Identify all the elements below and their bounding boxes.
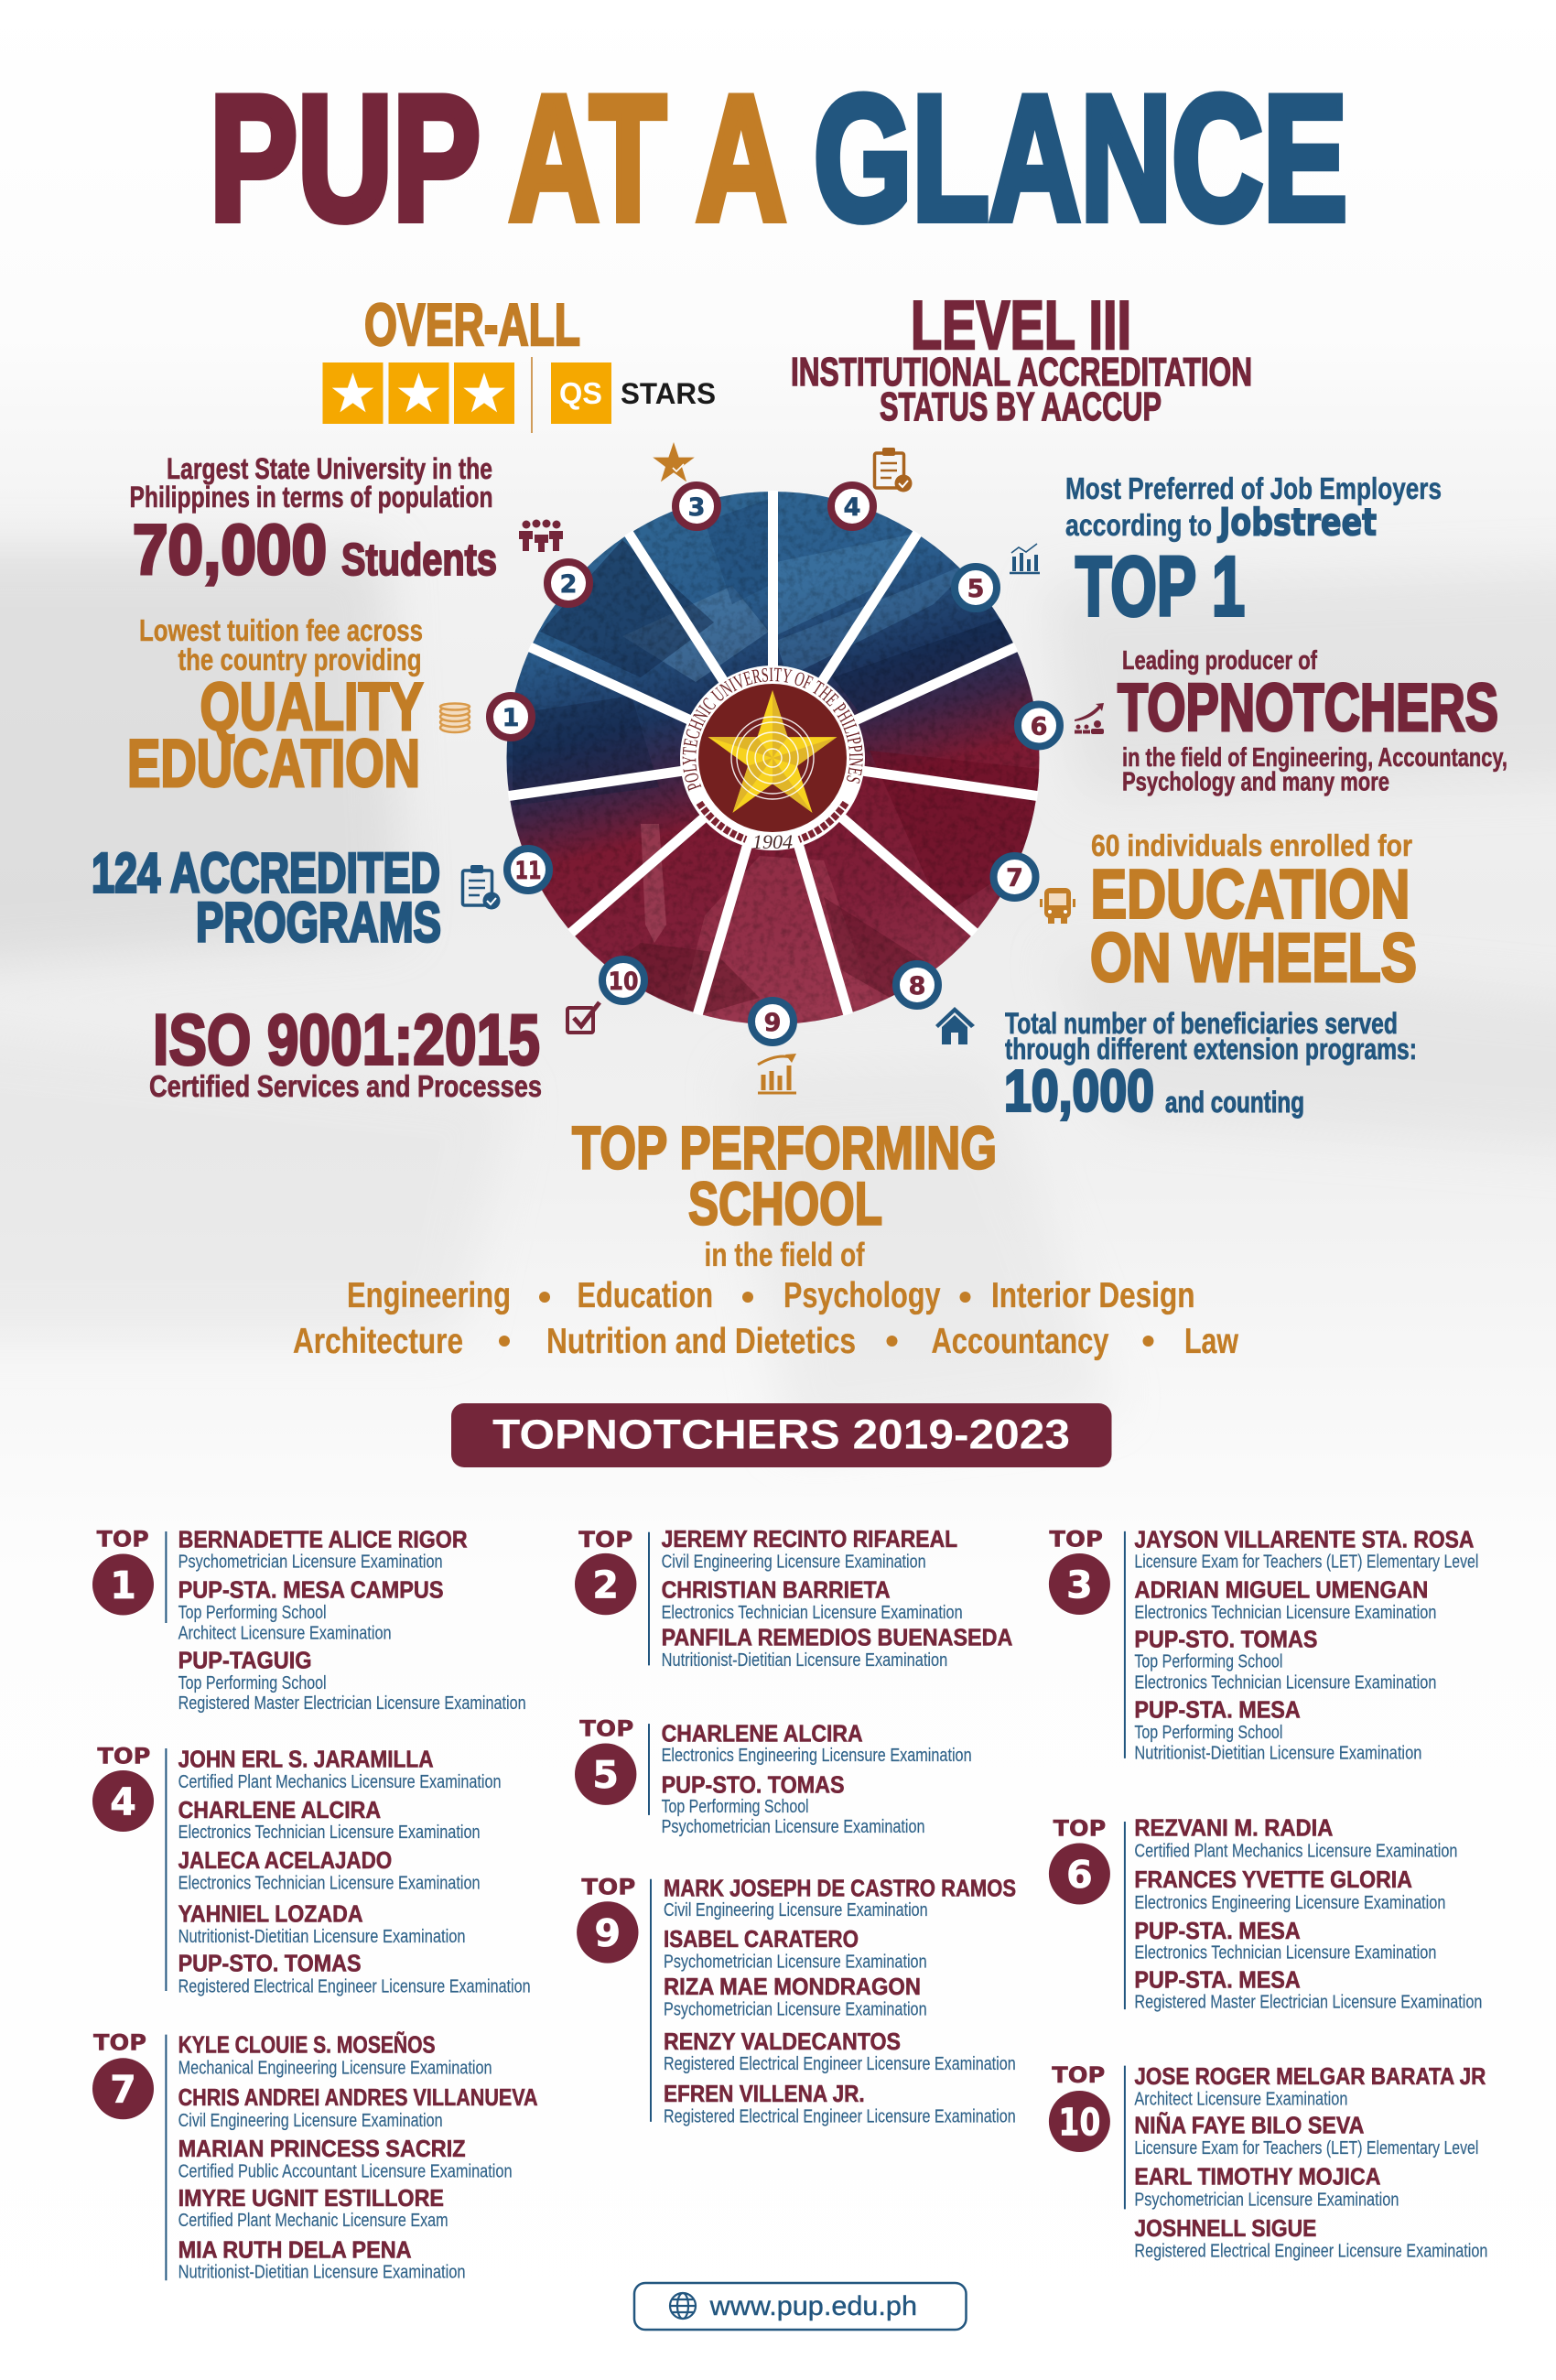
top 2 badge bbox=[575, 1527, 636, 1615]
top 3 badge bbox=[1049, 1526, 1110, 1615]
top 2 block: JEREMY RECINTO RIFAREAL bbox=[662, 1525, 957, 1552]
top 7 block: Nutritionist-Dietitian Licensure Examination bbox=[178, 2263, 466, 2283]
top 5 block: Top Performing School bbox=[662, 1797, 809, 1817]
stat: accredited programs: PROGRAMS bbox=[196, 892, 441, 954]
top 4 block: Electronics Technician Licensure Examination bbox=[178, 1873, 481, 1893]
top 4 block: YAHNIEL LOZADA bbox=[178, 1900, 363, 1928]
stat: education on wheels: ON WHEELS bbox=[1090, 919, 1417, 996]
top 10 block: Architect Licensure Examination bbox=[1134, 2089, 1347, 2109]
top 6 block: Electronics Technician Licensure Examination bbox=[1134, 1943, 1436, 1964]
fields list: Accountancy bbox=[932, 1322, 1109, 1361]
three star boxes bbox=[322, 362, 514, 424]
icon: star with check bbox=[653, 442, 695, 481]
icon: rising people bbox=[1075, 703, 1104, 734]
top 7 badge: TOP bbox=[93, 2030, 146, 2056]
stat: topnotchers: Psychology and many more bbox=[1122, 767, 1389, 796]
top 4 block: JOHN ERL S. JARAMILLA bbox=[178, 1746, 434, 1773]
stat: largest state university: 70,000 bbox=[133, 511, 327, 590]
top 3 block: PUP-STO. TOMAS bbox=[1134, 1626, 1317, 1653]
top 10 block bbox=[1049, 2062, 1487, 2262]
top 9 block: EFREN VILLENA JR. bbox=[664, 2080, 865, 2107]
number badges: 3 bbox=[688, 493, 705, 522]
top 5 badge: TOP bbox=[579, 1716, 633, 1742]
icon: clipboard blue bbox=[463, 865, 500, 910]
top 6 block: Certified Plant Mechanics Licensure Examination bbox=[1134, 1841, 1457, 1861]
top 7 badge bbox=[92, 2030, 154, 2119]
top 7 badge: 7 bbox=[110, 2068, 136, 2112]
top 7 block: Civil Engineering Licensure Examination bbox=[178, 2111, 443, 2131]
website link pill: www.pup.edu.ph bbox=[709, 2291, 917, 2321]
level III accreditation: LEVEL III bbox=[911, 287, 1131, 363]
top 4 block: Certified Plant Mechanics Licensure Examination bbox=[178, 1772, 502, 1792]
top 4 block: JALECA ACELAJADO bbox=[178, 1846, 392, 1874]
top 2 block: Nutritionist-Dietitian Licensure Examination bbox=[662, 1650, 947, 1671]
stat: beneficiaries: and counting bbox=[1165, 1086, 1304, 1119]
top 9 block: RENZY VALDECANTOS bbox=[664, 2028, 901, 2055]
stat: education on wheels: EDUCATION bbox=[1091, 855, 1410, 932]
top 6 badge: 6 bbox=[1066, 1853, 1093, 1897]
fields list: Law bbox=[1184, 1322, 1239, 1361]
top 3 block: Electronics Technician Licensure Examination bbox=[1134, 1673, 1436, 1693]
top 5 badge bbox=[575, 1716, 636, 1805]
number badges: 7 bbox=[1006, 864, 1023, 892]
top 4 block: CHARLENE ALCIRA bbox=[178, 1796, 381, 1823]
number badges bbox=[490, 485, 1060, 1043]
stat: largest state university bbox=[130, 452, 497, 590]
stat: jobstreet top 1: Jobstreet bbox=[1217, 500, 1377, 544]
top 7 block bbox=[92, 2030, 538, 2283]
top 5 block: Electronics Engineering Licensure Examination bbox=[662, 1746, 972, 1766]
icon: growth chart bbox=[758, 1054, 796, 1093]
top 10 badge: 10 bbox=[1058, 2100, 1100, 2144]
top 6 block: PUP-STA. MESA bbox=[1134, 1966, 1301, 1994]
top 7 block: MIA RUTH DELA PENA bbox=[178, 2236, 412, 2264]
top 9 block: Psychometrician Licensure Examination bbox=[664, 1999, 927, 2019]
stat: beneficiaries bbox=[1004, 1007, 1417, 1124]
top 6 block: REZVANI M. RADIA bbox=[1134, 1813, 1334, 1841]
top 10 block: Licensure Exam for Teachers (LET) Elementary Level bbox=[1134, 2138, 1478, 2158]
stat: ISO certification: ISO 9001:2015 bbox=[153, 1000, 540, 1080]
number badges: 1 bbox=[502, 704, 519, 732]
top 9 block: ISABEL CARATERO bbox=[664, 1925, 859, 1953]
number badges: 8 bbox=[909, 972, 925, 1001]
top 6 block: Registered Master Electrician Licensure Examination bbox=[1134, 1992, 1482, 2012]
top 1 block: PUP-STA. MESA CAMPUS bbox=[178, 1575, 444, 1603]
top 10 block: NIÑA FAYE BILO SEVA bbox=[1134, 2112, 1365, 2139]
top 5 badge: 5 bbox=[592, 1753, 619, 1797]
top 10 badge bbox=[1049, 2062, 1110, 2152]
fields list: Architecture bbox=[293, 1322, 463, 1361]
stat: topnotchers: Leading producer of bbox=[1122, 646, 1317, 676]
number badges: 5 bbox=[967, 575, 984, 603]
top 4 block: Nutritionist-Dietitian Licensure Examination bbox=[178, 1927, 466, 1947]
top 9 block: Civil Engineering Licensure Examination bbox=[664, 1900, 928, 1920]
top 7 block: Certified Public Accountant Licensure Examination bbox=[178, 2161, 513, 2181]
stat: beneficiaries: through different extension programs: bbox=[1005, 1033, 1417, 1066]
top 1 block bbox=[92, 1525, 526, 1714]
top 9 block bbox=[577, 1874, 1016, 2127]
top 9 block: Registered Electrical Engineer Licensure Examination bbox=[664, 2107, 1016, 2127]
stat: largest state university: Students bbox=[341, 536, 497, 585]
fields list: Psychology bbox=[783, 1276, 941, 1315]
top 3 block: Top Performing School bbox=[1134, 1652, 1282, 1672]
title: AT A bbox=[509, 59, 786, 258]
stat: ISO certification: Certified Services and Processes bbox=[149, 1069, 542, 1103]
stat: quality education bbox=[127, 613, 423, 801]
icon: coins bbox=[440, 703, 470, 732]
website link pill bbox=[634, 2283, 967, 2330]
stat: beneficiaries: Total number of beneficiaries served bbox=[1005, 1007, 1398, 1040]
top 3 badge: TOP bbox=[1049, 1526, 1103, 1552]
stat: jobstreet top 1: Most Preferred of Job Employers bbox=[1065, 471, 1442, 505]
top 2 badge: TOP bbox=[578, 1527, 632, 1552]
over-all QS stars rating: OVER-ALL bbox=[364, 291, 580, 358]
top 7 block: CHRIS ANDREI ANDRES VILLANUEVA bbox=[178, 2083, 538, 2111]
top 5 block: PUP-STO. TOMAS bbox=[662, 1770, 845, 1798]
top 1 block: Psychometrician Licensure Examination bbox=[178, 1552, 443, 1572]
stat: jobstreet top 1: according to bbox=[1065, 508, 1212, 542]
stat: top performing school: in the field of bbox=[705, 1236, 865, 1273]
title: PUP bbox=[210, 59, 481, 258]
top 7 block: MARIAN PRINCESS SACRIZ bbox=[178, 2135, 466, 2162]
stat: largest state university: Philippines in terms of population bbox=[130, 481, 492, 514]
stat: jobstreet top 1: TOP 1 bbox=[1075, 540, 1245, 633]
top 6 block: PUP-STA. MESA bbox=[1134, 1917, 1301, 1944]
university seal bbox=[680, 665, 865, 853]
title bbox=[210, 59, 1347, 258]
top 3 block: Top Performing School bbox=[1134, 1723, 1282, 1743]
top 10 block: JOSE ROGER MELGAR BARATA JR bbox=[1134, 2062, 1486, 2090]
top 5 block: CHARLENE ALCIRA bbox=[662, 1720, 863, 1747]
stat: top performing school bbox=[293, 1113, 1239, 1361]
stat: quality education: QUALITY bbox=[200, 670, 423, 744]
top 4 badge bbox=[92, 1743, 154, 1832]
heading: topnotchers 2019-2023: TOPNOTCHERS 2019-2023 bbox=[492, 1412, 1070, 1458]
top 5 block bbox=[575, 1716, 972, 1837]
top 9 block: Psychometrician Licensure Examination bbox=[664, 1952, 927, 1972]
top 9 badge: TOP bbox=[581, 1874, 635, 1899]
number badges: 11 bbox=[514, 857, 542, 885]
top 9 block: RIZA MAE MONDRAGON bbox=[664, 1973, 921, 2000]
top 3 block: Licensure Exam for Teachers (LET) Elementary Level bbox=[1134, 1552, 1478, 1572]
number badges: 10 bbox=[608, 968, 639, 996]
top 9 block: MARK JOSEPH DE CASTRO RAMOS bbox=[664, 1875, 1016, 1902]
stat: jobstreet top 1 bbox=[1065, 471, 1442, 633]
fields list: Interior Design bbox=[991, 1276, 1195, 1315]
top 6 badge: TOP bbox=[1054, 1815, 1106, 1841]
icon: school bus bbox=[1040, 888, 1075, 924]
top 3 block: ADRIAN MIGUEL UMENGAN bbox=[1134, 1575, 1428, 1603]
top 2 block: Civil Engineering Licensure Examination bbox=[662, 1552, 926, 1572]
stat: beneficiaries: 10,000 bbox=[1004, 1058, 1154, 1124]
fields list: Nutrition and Dietetics bbox=[546, 1322, 856, 1361]
fields list bbox=[293, 1276, 1239, 1361]
top 4 block bbox=[92, 1743, 531, 1997]
top 3 block bbox=[1049, 1525, 1478, 1763]
top 1 block: PUP-TAGUIG bbox=[178, 1647, 312, 1674]
number badges: 4 bbox=[844, 493, 860, 522]
top 9 badge bbox=[577, 1874, 639, 1964]
stat: accredited programs bbox=[92, 842, 441, 954]
top 1 block: Architect Licensure Examination bbox=[178, 1623, 392, 1643]
number badges: 6 bbox=[1031, 712, 1047, 741]
top 4 badge: TOP bbox=[97, 1743, 150, 1769]
over-all QS stars rating bbox=[322, 291, 716, 433]
top 7 block: IMYRE UGNIT ESTILLORE bbox=[178, 2184, 444, 2212]
top 6 block bbox=[1049, 1813, 1482, 2012]
top 1 badge: TOP bbox=[97, 1526, 149, 1552]
level III accreditation: STATUS BY AACCUP bbox=[880, 384, 1162, 429]
top 2 block bbox=[575, 1525, 1013, 1671]
top 3 block: Electronics Technician Licensure Examination bbox=[1134, 1603, 1436, 1623]
top 3 badge: 3 bbox=[1066, 1563, 1093, 1607]
top 1 block: BERNADETTE ALICE RIGOR bbox=[178, 1525, 468, 1552]
stat: quality education: EDUCATION bbox=[127, 727, 420, 801]
top 1 block: Top Performing School bbox=[178, 1603, 327, 1623]
top 9 badge: 9 bbox=[595, 1911, 621, 1955]
level III accreditation: INSTITUTIONAL ACCREDITATION bbox=[791, 350, 1252, 395]
top 2 block: PANFILA REMEDIOS BUENASEDA bbox=[662, 1623, 1013, 1650]
top 3 block: PUP-STA. MESA bbox=[1134, 1695, 1301, 1723]
top 10 badge: TOP bbox=[1052, 2062, 1105, 2088]
stat: education on wheels: 60 individuals enrolled for bbox=[1091, 828, 1412, 862]
top 2 block: CHRISTIAN BARRIETA bbox=[662, 1575, 891, 1603]
icon: people bbox=[519, 520, 563, 552]
QS logo bbox=[551, 362, 716, 424]
top 6 block: FRANCES YVETTE GLORIA bbox=[1134, 1866, 1412, 1893]
stat: accredited programs: 124 ACCREDITED bbox=[92, 842, 440, 904]
top 4 badge: 4 bbox=[110, 1780, 136, 1823]
top 3 block: JAYSON VILLARENTE STA. ROSA bbox=[1134, 1525, 1475, 1552]
top 4 block: Electronics Technician Licensure Examination bbox=[178, 1823, 481, 1843]
top 1 badge: 1 bbox=[110, 1563, 136, 1607]
top 1 block: Registered Master Electrician Licensure Examination bbox=[178, 1693, 526, 1714]
top 6 block: Electronics Engineering Licensure Examination bbox=[1134, 1893, 1445, 1913]
stat: top performing school: SCHOOL bbox=[688, 1170, 882, 1238]
top 7 block: Mechanical Engineering Licensure Examination bbox=[178, 2058, 492, 2078]
title: GLANCE bbox=[814, 59, 1347, 258]
top 9 block: Registered Electrical Engineer Licensure Examination bbox=[664, 2054, 1016, 2074]
heading: topnotchers 2019-2023 bbox=[451, 1403, 1111, 1467]
number badges: 2 bbox=[560, 570, 577, 599]
stat: quality education: the country providing bbox=[178, 643, 421, 676]
icon: clipboard gold bbox=[875, 448, 912, 492]
top 1 block: Top Performing School bbox=[178, 1673, 327, 1693]
top 6 badge bbox=[1049, 1815, 1110, 1904]
stat: education on wheels bbox=[1090, 828, 1417, 996]
icon: globe bbox=[670, 2293, 696, 2319]
QS logo: STARS bbox=[621, 377, 716, 410]
top 4 block: PUP-STO. TOMAS bbox=[178, 1949, 362, 1976]
top 7 block: KYLE CLOUIE S. MOSEÑOS bbox=[178, 2030, 436, 2058]
fields list: Engineering bbox=[347, 1276, 511, 1315]
top 10 block: Psychometrician Licensure Examination bbox=[1134, 2191, 1399, 2211]
top 5 block: Psychometrician Licensure Examination bbox=[662, 1817, 925, 1837]
stat: ISO certification bbox=[149, 1000, 542, 1103]
top 4 block: Registered Electrical Engineer Licensure Examination bbox=[178, 1977, 531, 1997]
level III accreditation bbox=[791, 287, 1252, 429]
university seal: 1904 bbox=[752, 830, 793, 853]
top 2 block: Electronics Technician Licensure Examination bbox=[662, 1603, 963, 1623]
top 7 block: Certified Plant Mechanic Licensure Exam bbox=[178, 2211, 448, 2231]
QS logo: QS bbox=[559, 376, 602, 410]
university seal: POLYTECHNIC UNIVERSITY OF THE PHILIPPINES bbox=[683, 668, 863, 792]
stat: top performing school: TOP PERFORMING bbox=[572, 1113, 997, 1181]
icon: check box bbox=[567, 1002, 600, 1033]
icon: house bbox=[935, 1007, 975, 1044]
photo wheel bbox=[507, 491, 1040, 1023]
top 10 block: JOSHNELL SIGUE bbox=[1134, 2214, 1316, 2242]
stat: quality education: Lowest tuition fee across bbox=[139, 613, 423, 647]
number badges: 9 bbox=[764, 1009, 781, 1037]
stat: topnotchers bbox=[1118, 646, 1507, 796]
top 10 block: EARL TIMOTHY MOJICA bbox=[1134, 2163, 1381, 2191]
icon: chart blue bbox=[1010, 544, 1040, 573]
top 3 block: Nutritionist-Dietitian Licensure Examination bbox=[1134, 1743, 1421, 1763]
top 2 badge: 2 bbox=[592, 1563, 619, 1607]
top 1 badge bbox=[92, 1526, 154, 1615]
fields list: Education bbox=[577, 1276, 713, 1315]
stat: largest state university: Largest State University in the bbox=[167, 452, 492, 485]
